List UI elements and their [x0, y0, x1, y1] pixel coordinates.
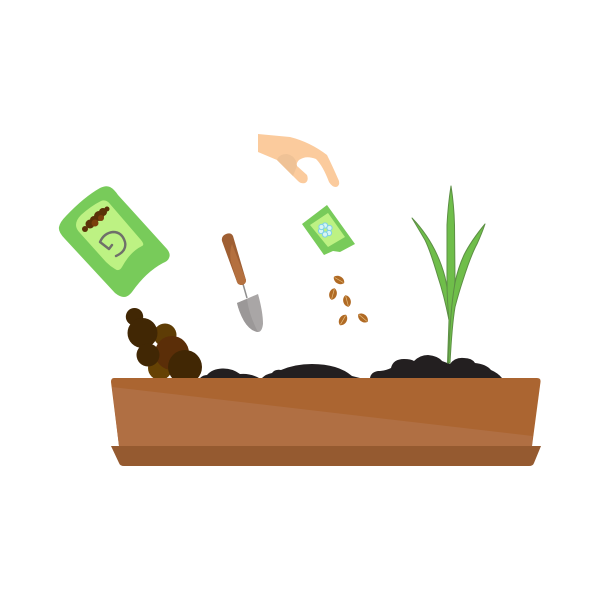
flower on packet — [318, 223, 332, 237]
pot shaded facet — [112, 387, 532, 446]
seed 1 — [332, 274, 346, 286]
mound: right — [370, 355, 502, 378]
seeds falling — [328, 274, 370, 327]
leaf: right — [448, 224, 485, 363]
trowel stem — [243, 284, 247, 298]
plant — [412, 186, 485, 363]
leaf: left — [412, 218, 449, 320]
hand palm shade — [277, 154, 297, 176]
pot body — [111, 378, 541, 446]
seed 5 — [356, 311, 370, 325]
seed 4 — [337, 313, 349, 327]
soil picture on bag — [82, 206, 110, 232]
icon: hand — [258, 134, 339, 187]
pot saucer — [111, 446, 541, 466]
trowel blade — [237, 294, 263, 332]
letter G on bag — [100, 232, 125, 256]
icon: large fertilizer bag — [59, 186, 170, 297]
seed 3 — [342, 294, 352, 308]
pot: trough — [111, 378, 541, 466]
leaf: centre — [447, 186, 455, 363]
mound: middle — [262, 364, 360, 378]
soil: pile falling from bag — [126, 308, 202, 384]
mound: left — [200, 368, 259, 378]
icon: small seed packet — [302, 205, 355, 255]
soil mounds — [200, 355, 502, 378]
icon: trowel — [222, 233, 263, 332]
seed 2 — [328, 287, 338, 301]
trowel handle — [222, 233, 246, 285]
